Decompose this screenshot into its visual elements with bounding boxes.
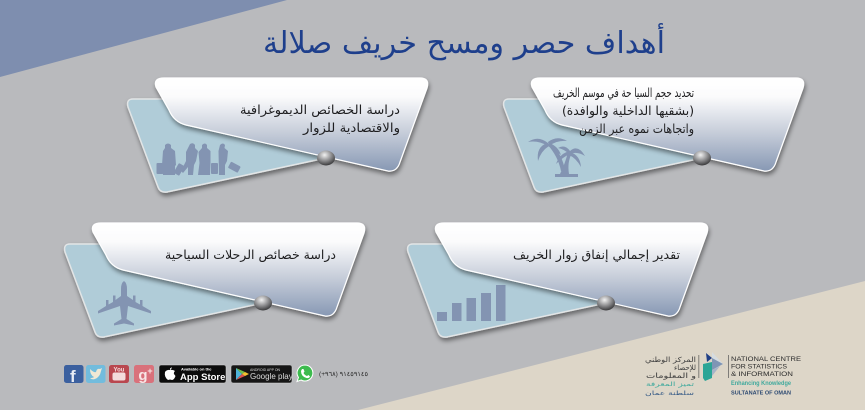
icon: travellers xyxy=(156,143,241,176)
text: tourism volume: واتجاهات نموه عبر الزمن xyxy=(579,121,694,137)
panel: tourism volume xyxy=(504,78,804,192)
icon: whatsapp xyxy=(297,365,313,382)
front plate xyxy=(435,223,708,316)
phone number: (+٩٦٨) ٩١٤٥٩١٤٥ xyxy=(319,371,369,378)
logo: national centre xyxy=(645,352,802,397)
icon: youtube xyxy=(109,365,129,383)
arabic name: المركز الوطني xyxy=(645,356,696,364)
panel: trips xyxy=(65,223,365,337)
english name xyxy=(731,356,802,378)
text: demographics: دراسة الخصائص الديموغرافية xyxy=(240,102,400,118)
badge: google play: Google play xyxy=(250,372,293,381)
icon: google plus xyxy=(134,365,154,384)
back plate xyxy=(504,99,702,192)
icon: google plus: + xyxy=(147,366,153,376)
text: demographics xyxy=(240,102,400,136)
title: أهداف حصر ومسح خريف صلالة xyxy=(263,22,665,61)
icon: youtube: You xyxy=(114,368,125,374)
icon: google plus: g xyxy=(138,367,148,384)
back plate xyxy=(408,244,606,337)
back plate xyxy=(128,99,326,192)
text: tourism volume: (بشقيها الداخلية والوافدة) xyxy=(562,103,694,119)
arabic sultanate: سلطنة عمان xyxy=(645,390,694,397)
english name: & INFORMATION xyxy=(731,371,793,378)
icon: airplane xyxy=(98,281,151,326)
icon: facebook xyxy=(64,365,84,386)
arabic name: و المعلومات xyxy=(646,372,696,380)
text: demographics: والاقتصادية للزوار xyxy=(302,120,400,136)
ball xyxy=(317,150,335,166)
ball xyxy=(254,296,272,310)
text: tourism volume: تحديد حجم السيا حة في موسم الخريف xyxy=(553,85,694,101)
badge: app store: Available on the xyxy=(181,366,212,372)
ball xyxy=(693,150,711,166)
english sultanate: SULTANATE OF OMAN xyxy=(731,390,791,396)
back plate xyxy=(65,244,263,337)
front plate xyxy=(155,78,428,171)
ball xyxy=(597,296,615,310)
icon: palm trees xyxy=(528,138,585,177)
arabic tagline: تميز المعرفة xyxy=(646,381,695,388)
social and app links xyxy=(64,365,369,386)
badge: app store xyxy=(159,365,226,383)
icon: bar chart xyxy=(437,285,506,321)
arabic name xyxy=(645,356,696,380)
badge: google play: ANDROID APP ON xyxy=(250,368,281,372)
text: trips: دراسة خصائص الرحلات السياحية xyxy=(165,247,336,263)
corner: beige triangle xyxy=(358,281,865,410)
corner: blue triangle xyxy=(0,0,287,77)
english name: FOR STATISTICS xyxy=(731,364,787,370)
arabic name: للإحصاء xyxy=(674,364,696,372)
badge: google play xyxy=(231,365,293,383)
front plate xyxy=(92,223,365,316)
icon: twitter xyxy=(86,365,106,383)
english tagline: Enhancing Knowledge xyxy=(731,380,791,387)
icon: facebook: f xyxy=(70,367,76,386)
panel: demographics xyxy=(128,78,428,192)
front plate xyxy=(531,78,804,171)
badge: app store: App Store xyxy=(180,372,225,383)
english name: NATIONAL CENTRE xyxy=(731,356,802,363)
panel: spending xyxy=(408,223,708,337)
text: tourism volume xyxy=(553,85,694,137)
text: spending: تقدير إجمالي إنفاق زوار الخريف xyxy=(513,247,681,263)
logo mark xyxy=(703,352,723,381)
